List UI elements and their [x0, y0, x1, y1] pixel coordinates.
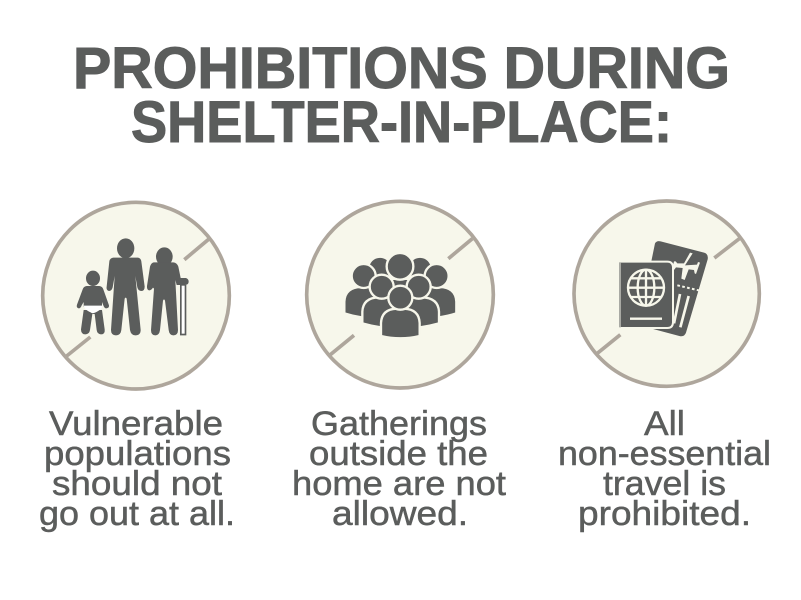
- icon: elder with cane: [147, 247, 189, 335]
- caption: travel: prohibited.: [578, 495, 751, 533]
- caption: gatherings: allowed.: [332, 495, 468, 533]
- panel: gatherings: [292, 201, 507, 533]
- icon: outer people: [344, 264, 456, 319]
- caption: gatherings: Gatherings: [311, 405, 487, 443]
- caption: travel: All: [644, 405, 685, 443]
- caption: gatherings: outside the: [309, 435, 488, 473]
- icon: prohibition circle with people: [43, 202, 229, 389]
- caption: vulnerable populations: Vulnerable: [49, 405, 223, 443]
- title: SHELTER-IN-PLACE:: [131, 90, 672, 155]
- caption: vulnerable populations: should not: [52, 465, 223, 503]
- panel: travel: [558, 201, 771, 533]
- icon: adult: [107, 238, 145, 335]
- caption: vulnerable populations: populations: [44, 435, 231, 473]
- caption: vulnerable populations: [39, 405, 235, 533]
- caption: gatherings: home are not: [292, 465, 507, 503]
- icon: passport: [620, 262, 673, 328]
- icon: prohibition circle with passport and ticket: [574, 201, 759, 386]
- title: PROHIBITIONS DURING: [73, 36, 730, 101]
- icon: prohibition circle with crowd: [307, 201, 493, 388]
- caption: vulnerable populations: go out at all.: [39, 495, 235, 533]
- icon: middle people: [362, 275, 439, 329]
- icon: back row people: [368, 253, 432, 303]
- icon: child: [77, 271, 109, 334]
- panel: vulnerable populations: [39, 202, 235, 533]
- icon: front person: [381, 286, 420, 338]
- icon: ticket: [637, 241, 708, 336]
- caption: travel: travel is: [603, 465, 726, 503]
- caption: gatherings: [292, 405, 507, 533]
- caption: travel: [558, 405, 771, 533]
- caption: travel: non-essential: [558, 435, 771, 473]
- title: [73, 36, 730, 155]
